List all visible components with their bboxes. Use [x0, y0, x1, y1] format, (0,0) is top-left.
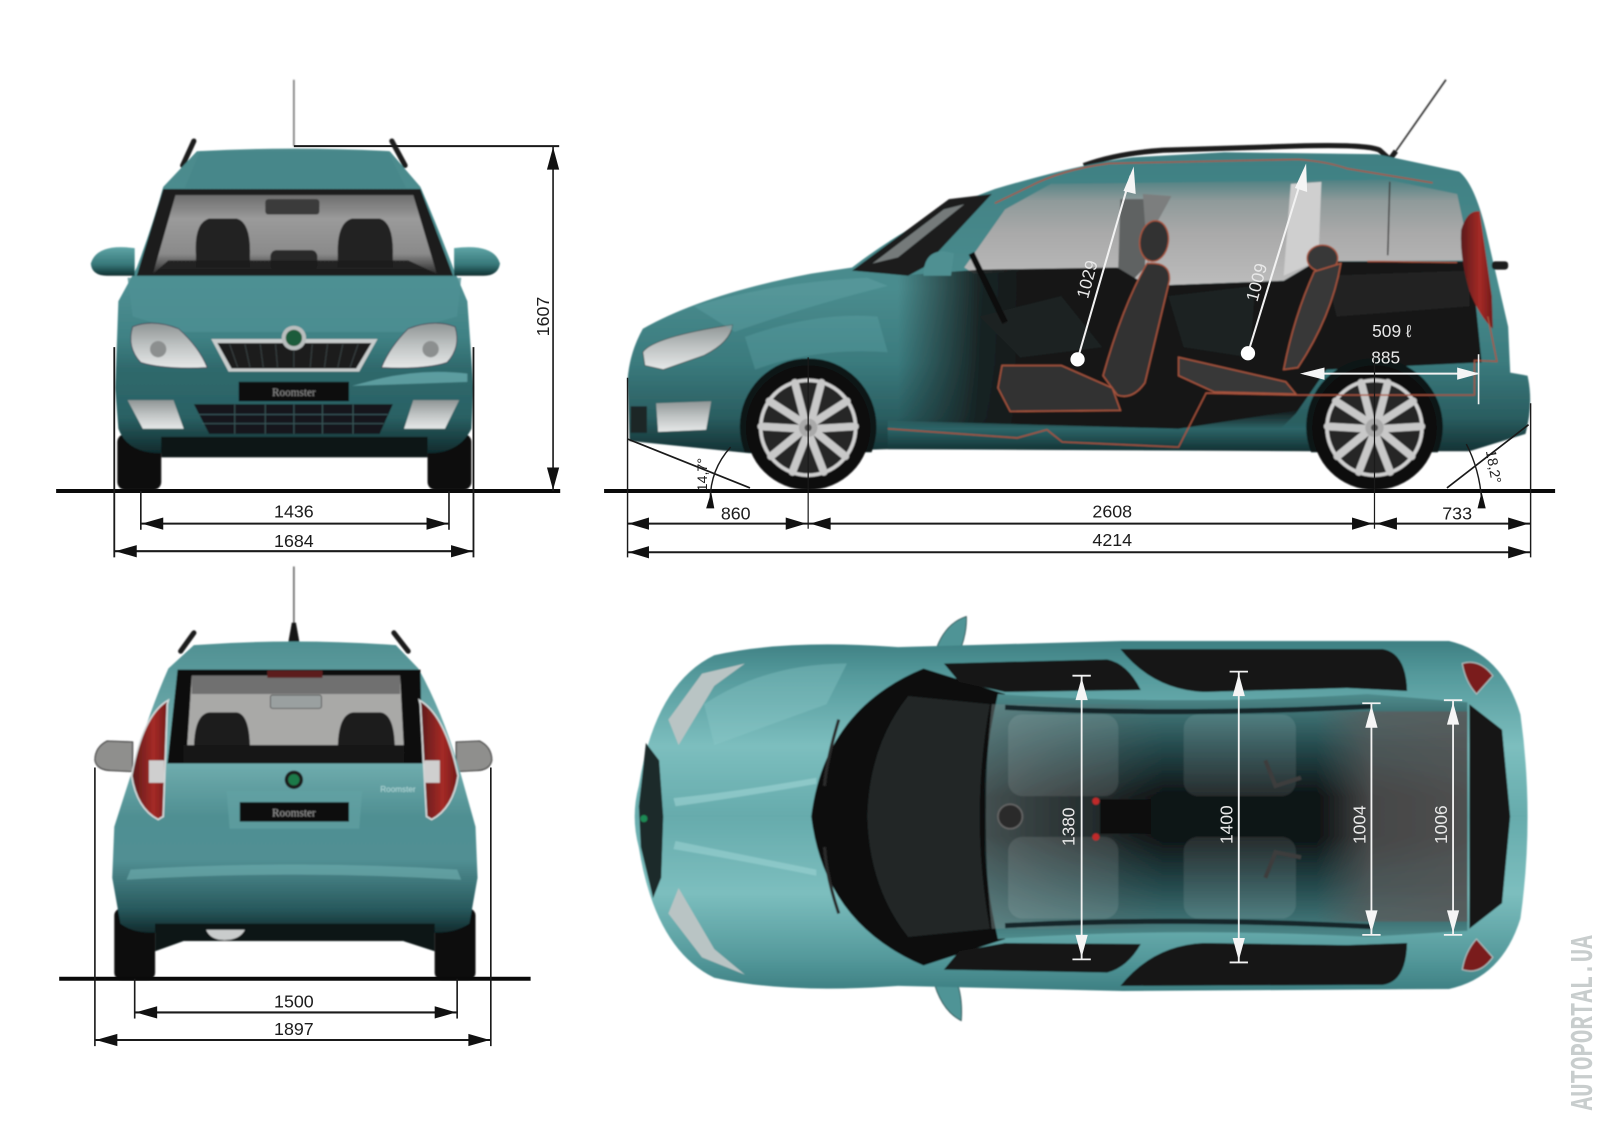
high stop light	[267, 671, 322, 678]
door mirror	[923, 251, 954, 276]
fog lights	[128, 400, 184, 429]
wheel: rear	[1312, 365, 1437, 490]
rear side windows	[1120, 649, 1407, 692]
dash cowl vents	[824, 720, 839, 913]
wheel: front	[746, 365, 870, 490]
front side windows	[944, 659, 1141, 692]
number plate	[240, 802, 349, 822]
handbrake markers	[1092, 798, 1099, 805]
rear view car illustration: Roomster	[272, 808, 316, 820]
front view dimension lines	[56, 146, 560, 557]
body shell	[628, 152, 1530, 453]
dashboard	[153, 260, 437, 274]
side view white arrows	[1070, 163, 1480, 404]
front cabin overlay	[986, 704, 1163, 929]
panel: side view	[604, 80, 1555, 558]
front view arrowheads	[115, 147, 559, 557]
rear seats	[194, 712, 250, 750]
wheels	[117, 434, 471, 490]
body shell	[115, 149, 473, 453]
antenna	[1396, 80, 1446, 151]
bumper highlight	[352, 372, 467, 386]
rear window glass	[187, 676, 404, 753]
label: height 1607: 1607	[533, 297, 553, 336]
top view car illustration	[635, 617, 1528, 1021]
rear fog lamp	[206, 930, 245, 940]
bonnet highlights	[673, 778, 816, 806]
hood highlight	[128, 278, 461, 332]
label: wheelbase 2608: 2608	[1092, 502, 1132, 522]
label: departure angle: 18,2°	[1482, 449, 1504, 485]
interior red outline	[888, 159, 1497, 447]
front view car illustration	[91, 80, 500, 490]
antenna	[293, 567, 295, 633]
grille badge	[640, 815, 647, 822]
roof rail	[1084, 146, 1396, 165]
front seats	[196, 219, 250, 268]
grille slats	[230, 344, 358, 368]
arrow: 1380	[1072, 676, 1091, 959]
label: front overhang 860: 860	[721, 504, 751, 524]
lower grille	[194, 404, 393, 434]
label: 1380: 1380	[1058, 807, 1078, 846]
tailgate badge	[285, 771, 303, 789]
body shell	[635, 641, 1528, 991]
label: length 4214: 4214	[1092, 530, 1132, 550]
roof panel	[185, 151, 406, 188]
front seat	[998, 219, 1171, 411]
tail lights	[1462, 662, 1493, 694]
rear window surround	[167, 670, 422, 763]
headlights	[668, 663, 745, 745]
antenna	[293, 80, 295, 146]
fog light	[656, 401, 711, 432]
rear seat	[1179, 245, 1341, 394]
arrow: 1400	[1230, 672, 1248, 962]
lower interior	[898, 261, 1482, 439]
seats seen through roof	[1008, 714, 1296, 919]
rear-view mirror	[265, 199, 319, 214]
number plate recess	[227, 791, 362, 829]
arrow: 1006	[1444, 700, 1462, 935]
centre console	[1100, 799, 1151, 834]
front grille	[639, 743, 663, 898]
mirrors	[933, 617, 966, 663]
mirrors	[91, 247, 135, 276]
side view arrowheads	[629, 492, 1529, 558]
underbody	[161, 437, 428, 457]
headlight	[643, 325, 733, 370]
label: track 1436: 1436	[274, 502, 314, 522]
label: rear overhang 733: 733	[1442, 504, 1472, 524]
roof rails	[181, 633, 408, 651]
cargo area overlay	[1316, 711, 1467, 922]
front view car illustration: Roomster	[272, 387, 316, 399]
rear window	[1469, 704, 1510, 929]
bonnet highlight	[694, 278, 888, 332]
label: 1400: 1400	[1217, 805, 1237, 844]
side view dimension lines	[604, 357, 1555, 557]
wing highlight	[745, 316, 888, 370]
side view car illustration	[628, 80, 1530, 495]
rear view car illustration	[95, 567, 492, 980]
roof edge bars	[1005, 706, 1372, 927]
glass roof	[984, 694, 1467, 939]
label: 1006: 1006	[1431, 805, 1451, 844]
rear view arrowheads	[96, 1006, 490, 1046]
windscreen	[811, 669, 1005, 965]
door pillars	[1117, 199, 1148, 296]
label: rear track 1500: 1500	[274, 991, 314, 1011]
label: boot length 885: 885	[1371, 347, 1400, 367]
tailgate script: Roomster	[380, 785, 416, 794]
underbody	[155, 924, 435, 951]
upper interior and windows	[964, 180, 1471, 286]
windscreen	[852, 194, 992, 276]
arrow: 1004	[1362, 703, 1381, 935]
label: boot volume 509 l: 509 ℓ	[1372, 321, 1412, 341]
upper glass band	[192, 676, 400, 694]
label: 1004: 1004	[1349, 805, 1369, 844]
panel: rear view	[59, 567, 531, 1046]
tail lights	[132, 700, 168, 820]
tail light	[1461, 211, 1493, 329]
wheel arches	[739, 358, 1444, 454]
mirrors	[95, 741, 133, 772]
panel: front view	[56, 80, 560, 557]
headlights	[131, 323, 207, 368]
seat belt buckles	[1265, 760, 1301, 878]
rear view dimension lines	[59, 768, 531, 1046]
panel: top view	[635, 617, 1528, 1021]
bumper crease	[127, 864, 461, 880]
label: approach angle: 14,7°	[695, 458, 711, 491]
wheels	[114, 908, 476, 980]
number plate	[239, 382, 349, 401]
top view white dimension arrows	[1072, 672, 1462, 962]
label: front headroom 1029: 1029	[1072, 258, 1102, 300]
label: width 1684: 1684	[274, 531, 314, 551]
radiator grille	[211, 339, 378, 372]
label: rear headroom 1009: 1009	[1242, 261, 1271, 304]
sill	[888, 408, 1311, 449]
windscreen	[137, 189, 453, 276]
body shell	[112, 642, 478, 933]
grille badge	[282, 326, 306, 350]
roof rails	[183, 141, 405, 165]
steering wheel	[971, 253, 1005, 323]
label: width with mirrors 1897: 1897	[274, 1019, 314, 1039]
door card details	[1168, 286, 1255, 357]
